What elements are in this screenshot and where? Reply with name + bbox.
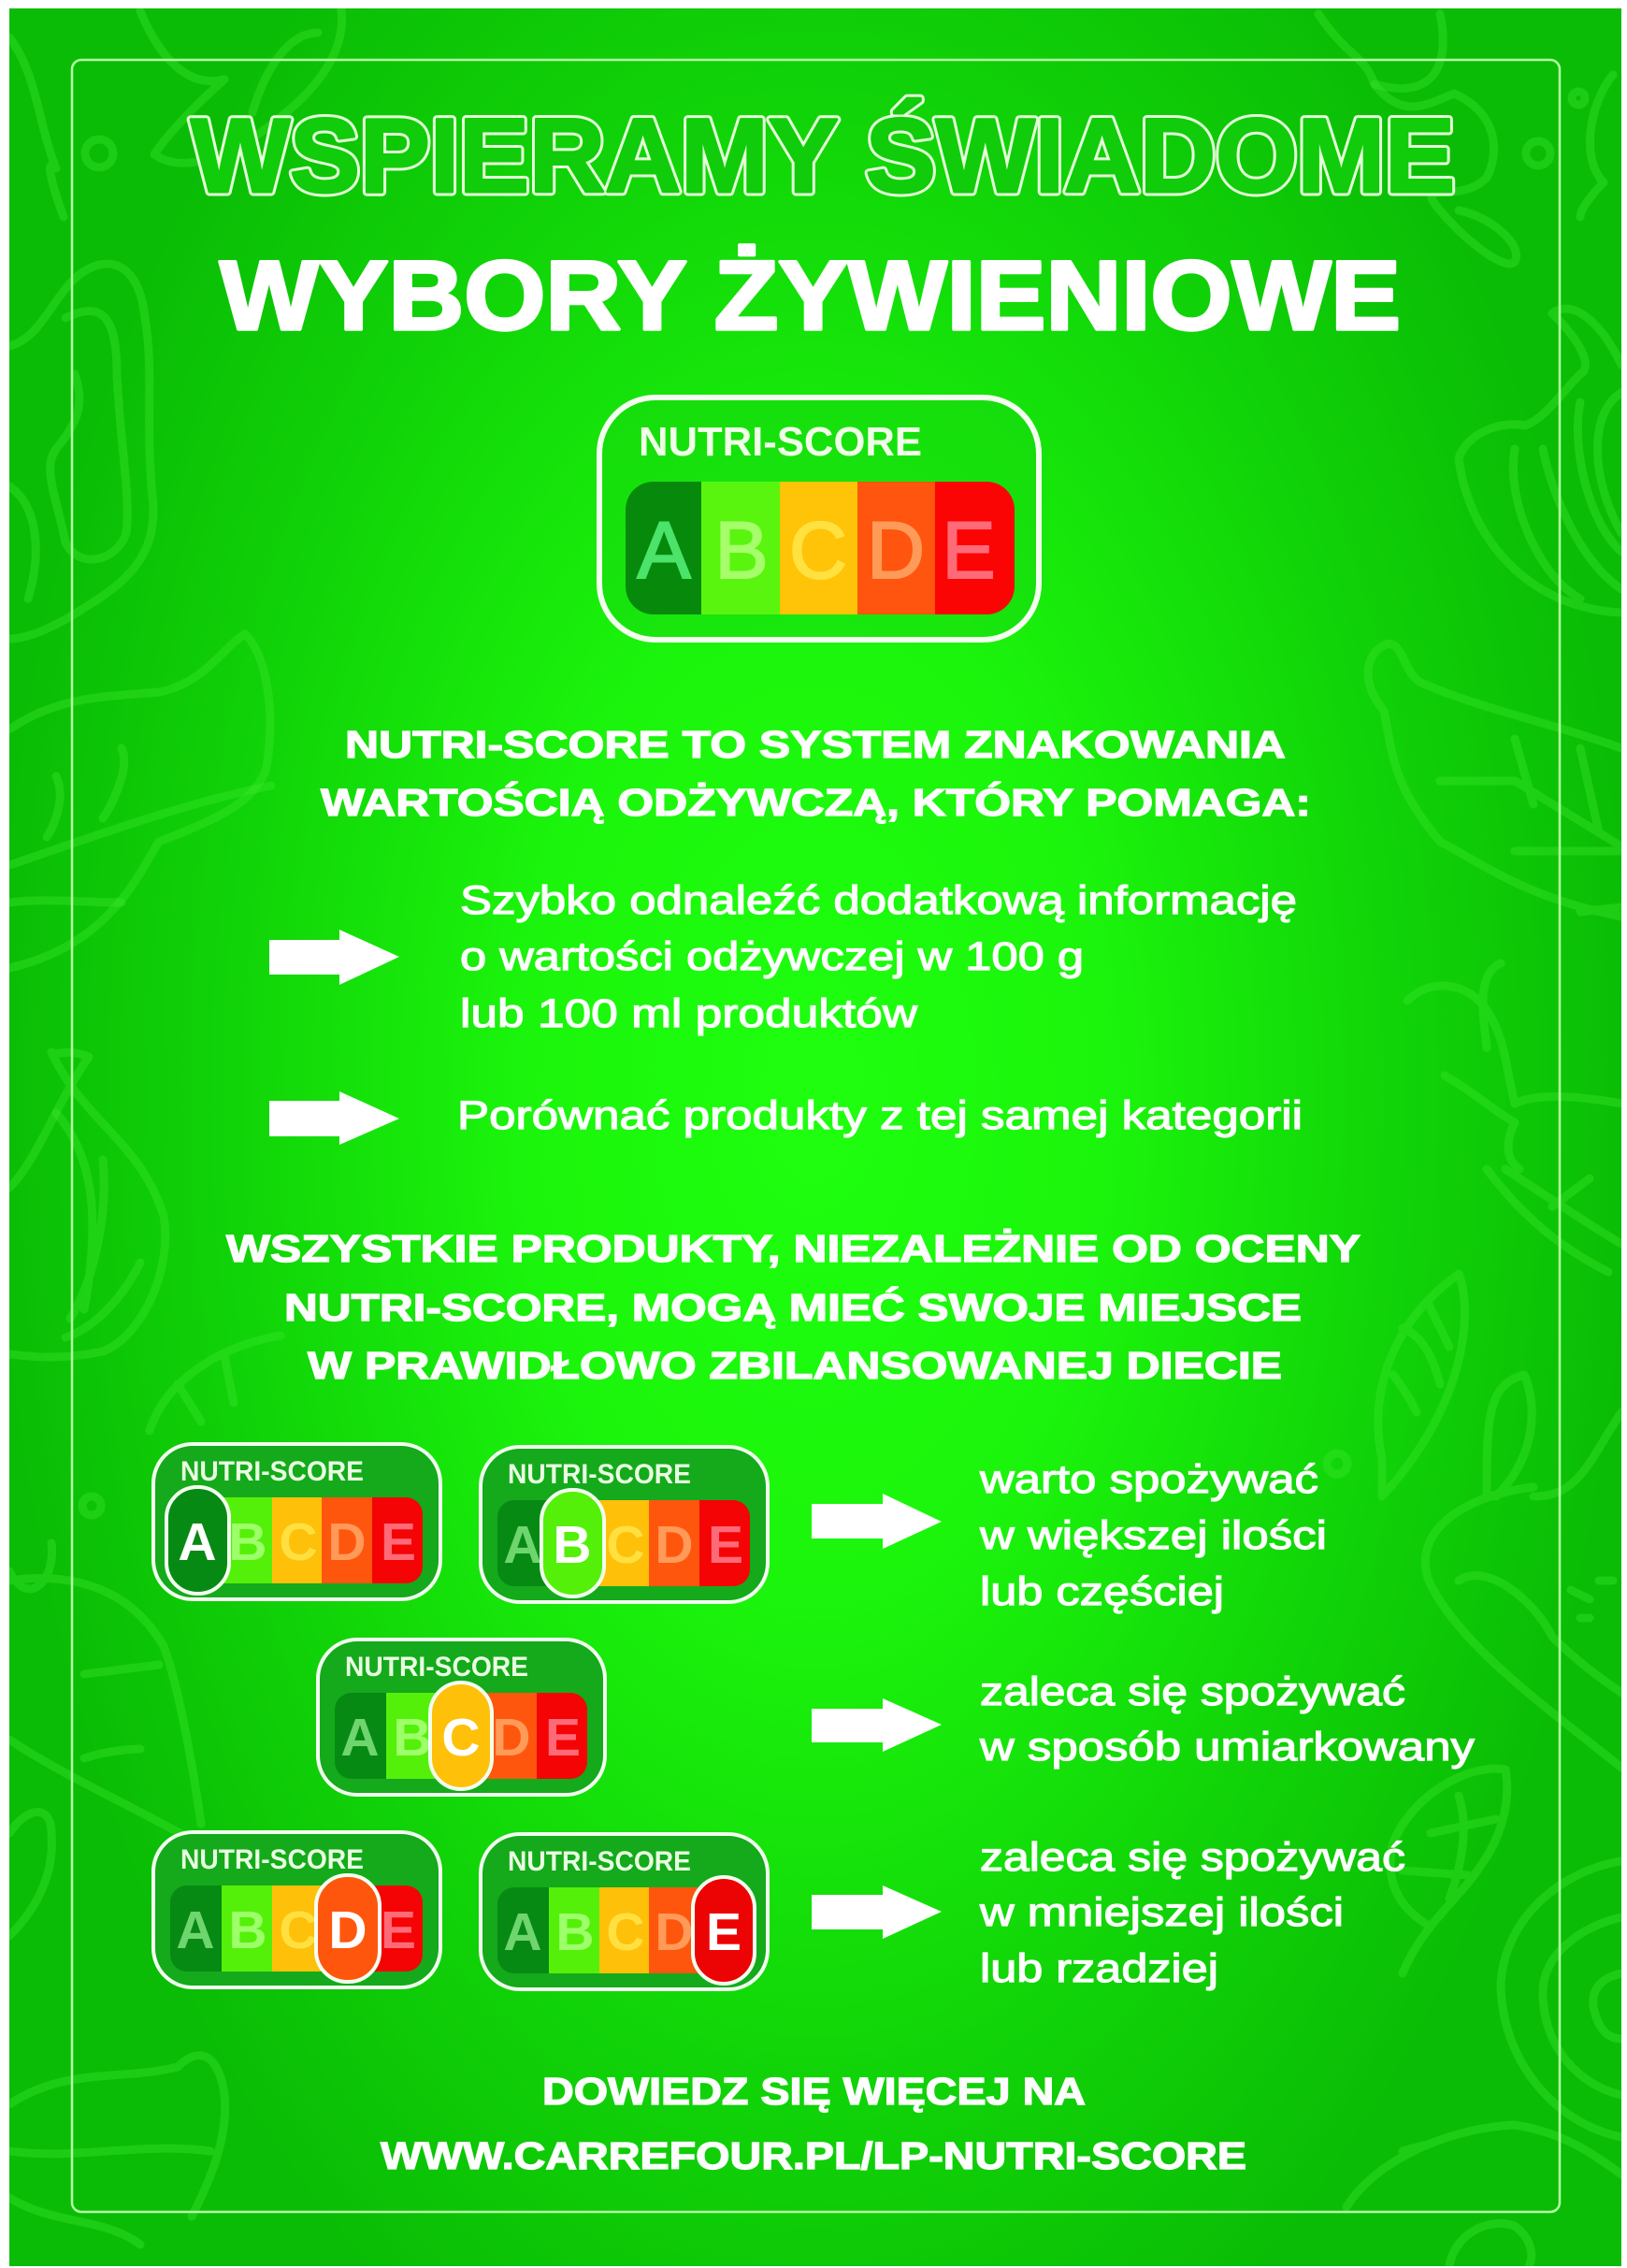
scale letters: C (789, 506, 847, 596)
badge title: NUTRI-SCORE (639, 419, 922, 465)
mini badge B: B (553, 1515, 592, 1575)
advice A/B: lub częściej (980, 1569, 1224, 1614)
heading: all products (226, 1227, 1361, 1387)
footer call to action: WWW.CARREFOUR.PL/LP-NUTRI-SCORE (381, 2134, 1246, 2177)
mini badge A: E (381, 1512, 416, 1572)
mini badge B: NUTRI-SCORE (508, 1459, 691, 1490)
scale letters: E (942, 506, 996, 596)
mini badge B: A (503, 1515, 542, 1575)
advice D/E (979, 1835, 1405, 1991)
mini badge E: A (503, 1902, 542, 1962)
advice C: w sposób umiarkowany (979, 1725, 1476, 1770)
heading: what is Nutri-Score (321, 723, 1311, 824)
title (191, 97, 1455, 351)
advice A/B: warto spożywać (979, 1457, 1318, 1502)
mini badge E: D (655, 1902, 694, 1962)
heading: all products: W PRAWIDŁOWO ZBILANSOWANEJ DIECIE (308, 1344, 1282, 1387)
mini badge C (318, 1640, 605, 1795)
advice A/B (979, 1457, 1327, 1614)
mini badge D (153, 1832, 440, 1987)
mini badge D: B (228, 1900, 267, 1960)
mini badge A: B (228, 1512, 267, 1572)
mini badge B: C (606, 1515, 645, 1575)
scale letters: B (714, 506, 769, 596)
mini badge C: A (340, 1708, 380, 1768)
benefit text 1: o wartości odżywczej w 100 g (460, 934, 1084, 979)
advice A/B: w większej ilości (979, 1513, 1327, 1558)
mini badge E: NUTRI-SCORE (508, 1846, 691, 1877)
footer call to action: DOWIEDZ SIĘ WIĘCEJ NA (542, 2070, 1086, 2113)
scale letters (637, 506, 996, 596)
heading: what is Nutri-Score: WARTOŚCIĄ ODŻYWCZĄ, KTÓRY POMAGA: (321, 781, 1311, 824)
main Nutri-Score badge (599, 397, 1039, 640)
heading: all products: WSZYSTKIE PRODUKTY, NIEZALEŻNIE OD OCENY (226, 1227, 1361, 1270)
benefit text 2: Porównać produkty z tej samej kategorii (457, 1093, 1303, 1138)
mini badge A: NUTRI-SCORE (180, 1456, 364, 1487)
mini badge D: NUTRI-SCORE (180, 1844, 364, 1875)
mini badge E: B (555, 1902, 595, 1962)
advice D/E: zaleca się spożywać (980, 1835, 1405, 1880)
mini badge A: A (178, 1512, 217, 1572)
mini badge A (153, 1444, 440, 1599)
advice C: zaleca się spożywać (980, 1669, 1405, 1714)
title line 1 outline: WSPIERAMY ŚWIADOME (191, 97, 1455, 214)
mini badge A: D (327, 1512, 367, 1572)
mini badge C: D (492, 1708, 531, 1768)
mini badge A: C (279, 1512, 318, 1572)
footer call to action (381, 2070, 1246, 2177)
scale letters: D (867, 506, 925, 596)
arrow C (812, 1698, 942, 1752)
heading: what is Nutri-Score: NUTRI-SCORE TO SYSTEM ZNAKOWANIA (345, 723, 1286, 766)
scale letters: A (637, 506, 691, 596)
benefit text 1: lub 100 ml produktów (460, 991, 918, 1036)
mini badge E: C (606, 1902, 645, 1962)
arrow 1 (269, 930, 399, 985)
mini badge C: NUTRI-SCORE (345, 1652, 528, 1683)
arrow A/B (812, 1494, 942, 1549)
mini badge D: D (328, 1900, 367, 1960)
heading: all products: NUTRI-SCORE, MOGĄ MIEĆ SWOJE MIEJSCE (284, 1286, 1302, 1329)
mini badge B: E (708, 1515, 743, 1575)
colour scale (626, 482, 1015, 614)
mini badge B (481, 1447, 768, 1602)
arrow 2 (269, 1091, 399, 1145)
mini badge B: D (655, 1515, 694, 1575)
advice D/E: lub rzadziej (980, 1946, 1218, 1991)
mini badge C: E (545, 1708, 581, 1768)
advice D/E: w mniejszej ilości (979, 1890, 1344, 1935)
mini badge D: E (381, 1900, 416, 1960)
mini badge D: A (176, 1900, 215, 1960)
benefit text 1: Szybko odnaleźć dodatkową informację (460, 878, 1297, 923)
title line 1 inner fill: WSPIERAMY ŚWIADOME (191, 97, 1455, 214)
mini badge E: E (706, 1902, 742, 1962)
advice C (979, 1669, 1476, 1770)
arrow D/E (812, 1885, 942, 1939)
mini badge D: C (279, 1900, 318, 1960)
mini badge E (481, 1834, 768, 1989)
benefit text 1 (460, 878, 1297, 1036)
mini badge C: B (393, 1708, 432, 1768)
title line 2: WYBORY ŻYWIENIOWE (220, 241, 1401, 351)
mini badge C: C (441, 1708, 481, 1768)
